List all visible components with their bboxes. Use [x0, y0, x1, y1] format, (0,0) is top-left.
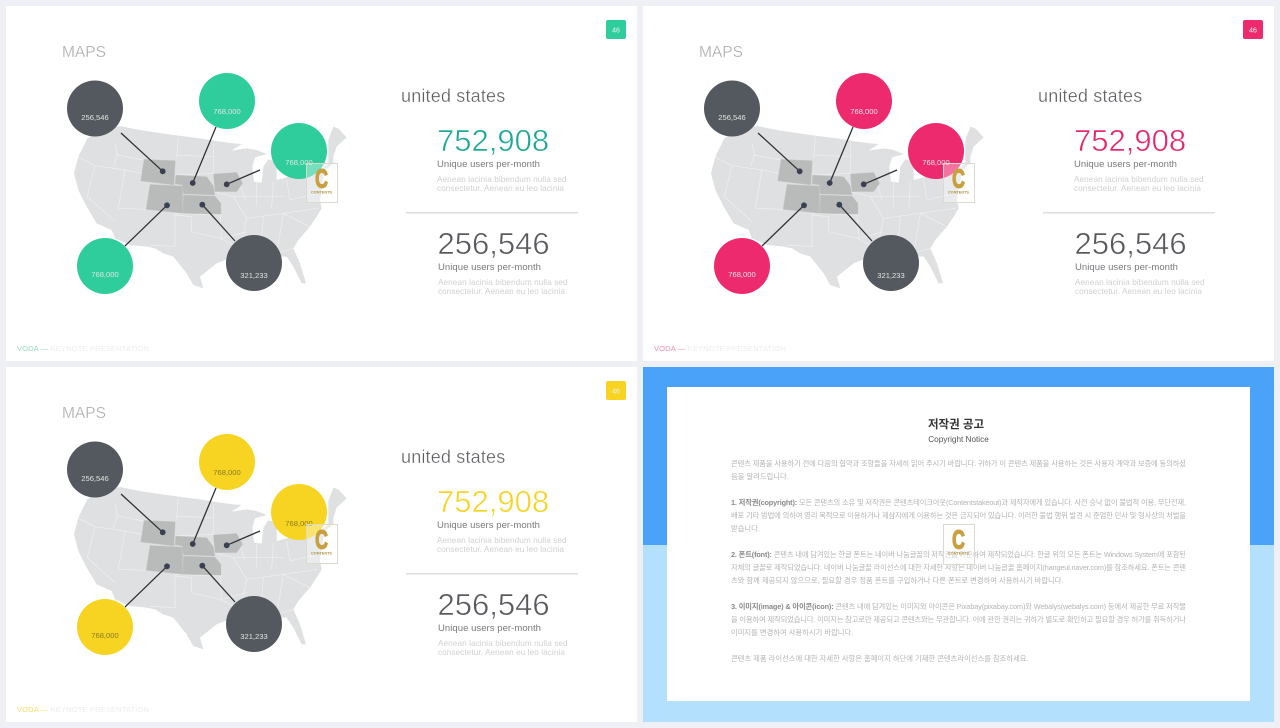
- state markers: [797, 168, 867, 208]
- notice body: 3. 이미지(image) & 아이콘(icon): 콘텐츠 내에 담겨있는 이미지와 아이콘은 Pixabay(pixabay.com)와 Webalys(webalys.com) 등에서 제공한 무료 저작물: [731, 602, 1186, 611]
- stat 1: [1074, 123, 1204, 193]
- US map: [711, 126, 984, 288]
- circle: bottom 768,000: [714, 238, 770, 294]
- connector lines: [121, 127, 260, 246]
- stat 1: [437, 484, 567, 554]
- stat 2: 256,546: [438, 226, 550, 261]
- heading: united states: [1038, 86, 1142, 106]
- circle: top 768,000: 768,000: [850, 107, 878, 116]
- slide title: MAPS: [62, 405, 106, 422]
- page badge: 46: [612, 388, 620, 396]
- panel: green slide: [6, 6, 637, 361]
- circle: top 768,000: 768,000: [213, 107, 241, 116]
- notice body: 자체의 글꼴로 제작되었습니다. 네이버 나눔글꼴 라이선스에 대한 자세한 사항은 네이버 나눔글꼴 홈페이지(hangeul.naver.com)를 참조하세요. 폰트는 콘텐: [731, 563, 1186, 572]
- watermark: C: [952, 525, 965, 554]
- stat 2: Unique users per-month: [438, 623, 541, 634]
- notice body: 콘텐츠 제품 라이선스에 대한 자세한 사항은 홈페이지 하단에 기재한 콘텐츠라이선스를 참조하세요.: [731, 654, 1029, 663]
- page badge: [1243, 20, 1263, 39]
- stat 2: Aenean lacinia bibendum nulla sed: [438, 639, 568, 648]
- notice body: 1. 저작권(copyright): 모든 콘텐츠의 소유 및 저작권은 콘텐츠테이크아웃(Contentstakeout)과 제작자에게 있습니다. 사전 승낙 없이 불법적 이용, 무단전재,: [731, 498, 1186, 507]
- stat 2: consectetur. Aenean eu leo lacinia: [1075, 287, 1202, 296]
- circle: 321,233: 321,233: [240, 632, 268, 641]
- state markers: [160, 168, 230, 208]
- stat 2: [438, 587, 568, 657]
- circle: top 768,000: 768,000: [213, 468, 241, 477]
- page badge: [606, 381, 626, 400]
- stat 2: Aenean lacinia bibendum nulla sed: [1075, 278, 1205, 287]
- stat 1: consectetur. Aenean eu leo lacinia: [1074, 184, 1201, 193]
- circle: top 768,000: [199, 73, 255, 129]
- circle: 321,233: 321,233: [240, 271, 268, 280]
- watermark: CONTENTS: [311, 190, 332, 194]
- notice body: [731, 459, 1186, 663]
- circle: 256,546: [67, 442, 123, 498]
- US map: [74, 487, 347, 649]
- connector lines: [121, 488, 260, 607]
- watermark: CONTENTS: [948, 552, 969, 556]
- circle: right 768,000: [908, 123, 964, 179]
- stat 2: Unique users per-month: [1075, 262, 1178, 273]
- stat 2: [1074, 226, 1205, 296]
- notice body: 2. 폰트(font): 콘텐츠 내에 담겨있는 한글 폰트는 네이버 나눔글꼴의 저작권을 기준하여 제작되었습니다. 한글 위의 모든 폰트는 Windows System에 포함된: [731, 550, 1186, 559]
- circle: right 768,000: [271, 484, 327, 540]
- footer: VODA — KEYNOTE PRESENTATION: [17, 344, 149, 353]
- panel: yellow slide: [6, 367, 637, 722]
- circle: 321,233: [226, 235, 282, 291]
- notice body: 을 이용하여 제작되었습니다. 이미지는 참고로만 제공되고 콘텐츠와는 무관합니다. 이에 관한 권리는 귀하가 별도로 확인하고 필요할 경우 허가를 취득하거나: [731, 615, 1186, 624]
- circle: 256,546: 256,546: [81, 474, 109, 483]
- notice body: 츠와 함께 제공되지 않으므로, 필요할 경우 정품 폰트를 구입하거나 다른 폰트로 변경하여 사용하시기 바랍니다.: [731, 576, 1064, 585]
- watermark: C: [315, 525, 328, 554]
- notice body: 콘텐츠 제품을 사용하기 전에 다음의 협약과 조항들을 자세히 읽어 주시기 바랍니다. 귀하가 이 콘텐츠 제품을 사용하는 것은 사용자 계약과 보증에 동의하셨: [731, 459, 1186, 468]
- stat 2: 256,546: [1074, 226, 1187, 261]
- stat 1: 752,908: [437, 123, 549, 158]
- stat 1: 752,908: [437, 484, 549, 519]
- page badge: 46: [612, 28, 620, 34]
- stat 1: Unique users per-month: [437, 520, 540, 531]
- slide title: MAPS: [699, 44, 743, 61]
- notice body: 음을 알려드립니다.: [731, 472, 789, 481]
- circle: bottom 768,000: [77, 238, 133, 294]
- circle: right 768,000: 768,000: [285, 519, 313, 528]
- watermark: C: [952, 164, 965, 193]
- footer: VODA — KEYNOTE PRESENTATION: [17, 705, 149, 714]
- stat 1: Unique users per-month: [437, 159, 540, 170]
- stat 2: consectetur. Aenean eu leo lacinia: [438, 287, 565, 296]
- stat 1: consectetur. Aenean eu leo lacinia: [437, 545, 564, 554]
- slide title: MAPS: [62, 44, 106, 61]
- stat 2: Unique users per-month: [438, 262, 541, 273]
- stat 1: Aenean lacinia bibendum nulla sed: [1074, 175, 1204, 184]
- notice title: Copyright Notice: [928, 435, 989, 444]
- stat 2: consectetur. Aenean eu leo lacinia: [438, 648, 565, 657]
- stat 1: Aenean lacinia bibendum nulla sed: [437, 536, 567, 545]
- stat 2: 256,546: [438, 587, 550, 622]
- stat 1: Unique users per-month: [1074, 159, 1177, 170]
- circle: 256,546: [704, 80, 760, 136]
- stat 1: 752,908: [1074, 123, 1186, 158]
- panel: copyright notice: [643, 367, 1274, 722]
- watermark: C: [315, 164, 328, 193]
- circle: bottom 768,000: 768,000: [91, 270, 119, 279]
- notice title: [928, 417, 989, 444]
- watermark: [944, 164, 974, 202]
- stat 1: [437, 123, 567, 193]
- watermark: CONTENTS: [311, 552, 332, 556]
- circle: top 768,000: [836, 73, 892, 129]
- circle: right 768,000: [271, 123, 327, 179]
- notice title: 저작권 공고: [928, 417, 984, 431]
- circle: 321,233: [226, 596, 282, 652]
- page badge: 46: [1249, 28, 1257, 34]
- notice body: 배포 기타 방법에 의하여 영리 목적으로 이용하거나 제삼자에게 이용하는 것은 금지되어 있습니다. 이러한 불법 행위 발견 시 준엄한 민사 및 형사상의 처벌을: [731, 511, 1186, 520]
- circle: right 768,000: 768,000: [285, 158, 313, 167]
- heading: united states: [401, 447, 505, 467]
- watermark: CONTENTS: [948, 190, 969, 194]
- watermark: [944, 524, 974, 564]
- panel: pink slide: [643, 6, 1274, 361]
- stat 1: Aenean lacinia bibendum nulla sed: [437, 175, 567, 184]
- page badge: [606, 20, 626, 39]
- heading: united states: [401, 86, 505, 106]
- circle: 321,233: [863, 235, 919, 291]
- stat 2: [438, 226, 568, 296]
- circle: 256,546: [67, 80, 123, 136]
- notice body: 받습니다.: [731, 524, 760, 533]
- connector lines: [758, 127, 897, 246]
- US map: [74, 126, 347, 288]
- circle: 256,546: 256,546: [81, 113, 109, 122]
- circle: top 768,000: [199, 434, 255, 490]
- stat 1: consectetur. Aenean eu leo lacinia: [437, 184, 564, 193]
- stat 2: Aenean lacinia bibendum nulla sed: [438, 278, 568, 287]
- state markers: [160, 529, 230, 569]
- watermark: [306, 164, 338, 202]
- footer: VODA — KEYNOTE PRESENTATION: [654, 344, 786, 353]
- circle: right 768,000: 768,000: [922, 158, 950, 167]
- circle: 321,233: 321,233: [877, 271, 905, 280]
- watermark: [306, 524, 338, 564]
- circle: bottom 768,000: 768,000: [728, 270, 756, 279]
- notice body: 이미지를 변경하여 사용하시기 바랍니다.: [731, 628, 853, 637]
- circle: 256,546: 256,546: [718, 113, 746, 122]
- circle: bottom 768,000: 768,000: [91, 631, 119, 640]
- circle: bottom 768,000: [77, 599, 133, 655]
